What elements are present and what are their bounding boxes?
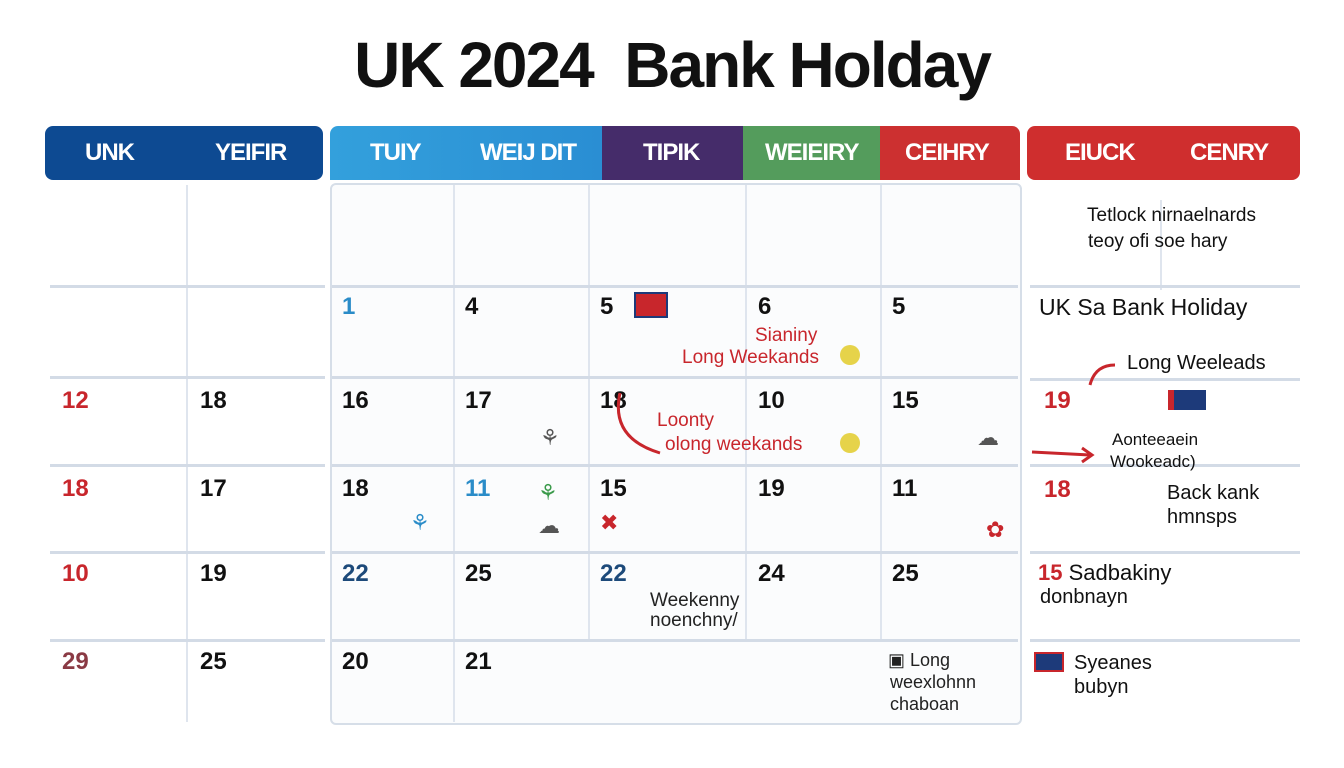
icon: union flag: [634, 292, 668, 318]
callout: weekenny: Weekenny: [650, 590, 739, 611]
text: 15: [892, 387, 919, 414]
icon: small cell icons: [410, 425, 1004, 542]
text: 10: [62, 560, 89, 587]
side panel items: 15 Sadbakiny: [1038, 560, 1171, 585]
text: 17: [465, 387, 492, 414]
text: 19: [758, 475, 785, 502]
side panel items: Syeanes: [1074, 652, 1152, 674]
text: 29: [62, 648, 89, 675]
text: 24: [758, 560, 785, 587]
side panel items: UK Sa Bank Holiday: [1039, 294, 1247, 320]
day numbers: [62, 293, 1114, 675]
side panel items: bubyn: [1074, 676, 1128, 698]
text: 18: [200, 387, 227, 414]
side panel items: Back kank: [1167, 482, 1259, 504]
text: 18: [62, 475, 89, 502]
header bar middle: WEIJ DIT: [480, 139, 576, 166]
callout: long weekends 1: Sianiny: [755, 325, 817, 346]
callout: long weekends 1: [682, 325, 860, 368]
text: 16: [342, 387, 369, 414]
text: 25: [465, 560, 492, 587]
header bar right: [1027, 126, 1300, 180]
icon: small cell icons: ✖: [600, 510, 618, 535]
callout: long weekend cell: weexlohnn: [890, 672, 976, 692]
side panel items: donbnayn: [1040, 586, 1128, 608]
callout: weekenny: [650, 590, 740, 631]
callout: long weekends 1: Long Weekands: [682, 347, 819, 368]
icon: small cell icons: ⚘: [538, 480, 558, 505]
icon: small cell icons: ✿: [986, 517, 1004, 542]
text: 22: [600, 560, 627, 587]
icon: small cell icons: ☁: [977, 425, 999, 450]
callout: weekenny: noenchny/: [650, 610, 738, 631]
header bar middle: TIPIK: [643, 139, 699, 166]
callout: long weekend cell: ▣ Long: [888, 650, 950, 670]
side panel items: 19: [1044, 387, 1071, 414]
header bar middle: [330, 126, 1020, 180]
header bar left: UNK: [85, 139, 134, 166]
text: 5: [600, 293, 613, 320]
header bar middle: WEIEIRY: [765, 139, 858, 166]
callout: long weekends 2: [616, 392, 860, 455]
arrow: [1032, 364, 1115, 464]
icon: small cell icons: ⚘: [540, 425, 560, 450]
side panel items: Tetlock nirnaelnards: [1087, 205, 1256, 226]
text: 4: [465, 293, 478, 320]
text: 12: [62, 387, 89, 414]
text: 11: [465, 475, 490, 502]
callout: long weekends 2: olong weekands: [665, 434, 802, 455]
icon: small cell icons: ☁: [538, 513, 560, 538]
text: 25: [200, 648, 227, 675]
text: 22: [342, 560, 369, 587]
text: 1: [342, 293, 355, 320]
callout: long weekends 2: Loonty: [657, 410, 714, 431]
text: 18: [600, 387, 627, 414]
text: 10: [758, 387, 785, 414]
text: 25: [892, 560, 919, 587]
text: 20: [342, 648, 369, 675]
callout: long weekend cell: chaboan: [890, 694, 959, 714]
side panel items: 18: [1044, 476, 1071, 503]
text: 6: [758, 293, 771, 320]
side panel items: hmnsps: [1167, 506, 1237, 528]
side panel items: [1034, 205, 1266, 698]
text: 19: [200, 560, 227, 587]
header bar middle: TUIY: [370, 139, 421, 166]
text: 21: [465, 648, 492, 675]
text: 11: [892, 475, 917, 502]
title: UK 2024 Bank Holday: [354, 29, 990, 101]
callout: long weekend cell: [888, 650, 976, 714]
header bar right: EIUCK: [1065, 139, 1135, 166]
icon: small cell icons: ⚘: [410, 510, 430, 535]
text: 18: [342, 475, 369, 502]
header bar left: YEIFIR: [215, 139, 286, 166]
side panel items: Long Weeleads: [1127, 352, 1266, 374]
text: 5: [892, 293, 905, 320]
side panel items: teoy ofi soe hary: [1088, 231, 1227, 252]
side panel items: Wookeadc): [1110, 452, 1196, 471]
header bar right: CENRY: [1190, 139, 1268, 166]
side panel items: Aonteeaein: [1112, 430, 1198, 449]
text: 17: [200, 475, 227, 502]
header bar middle: CEIHRY: [905, 139, 989, 166]
header bar left: [45, 126, 323, 180]
text: 15: [600, 475, 627, 502]
